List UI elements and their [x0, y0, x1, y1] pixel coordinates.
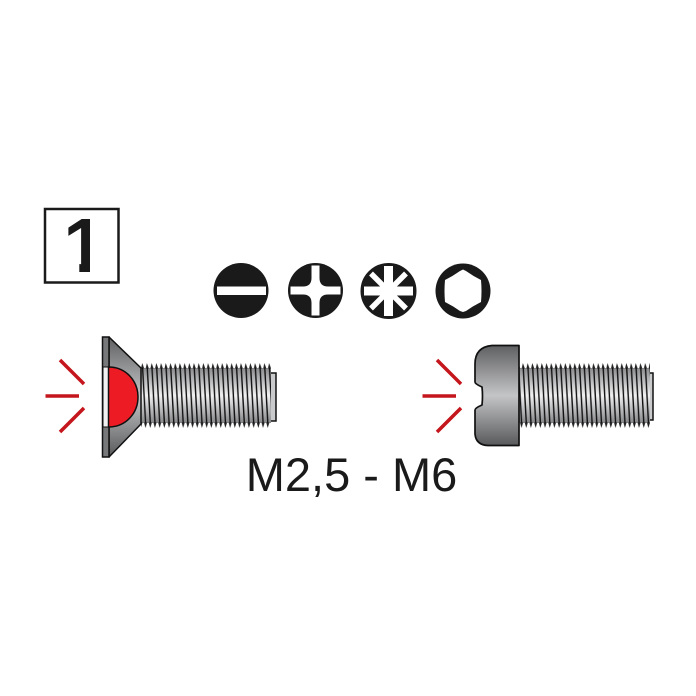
icon: slotted drive — [214, 263, 268, 318]
thread tip — [270, 373, 276, 421]
icon: pozidriv drive — [362, 264, 416, 318]
left screw red arrow marks — [46, 360, 84, 432]
head flange — [102, 337, 109, 457]
red recess — [108, 367, 138, 427]
number box: 1 — [63, 203, 106, 289]
size label: M2,5 - M6 — [246, 448, 457, 501]
flange highlight — [103, 367, 109, 427]
icon: phillips drive — [288, 263, 343, 318]
right screw: cylinder head — [475, 346, 653, 446]
threaded shaft — [519, 363, 650, 428]
threaded shaft — [141, 363, 271, 428]
left screw: countersunk head — [102, 337, 276, 457]
icon: hex drive — [436, 264, 490, 318]
cylinder head — [475, 346, 519, 446]
thread tip — [649, 373, 653, 420]
countersunk cone — [109, 337, 141, 457]
infographic: screw types — [44, 208, 654, 497]
right screw red arrow marks — [422, 360, 461, 432]
number box — [45, 203, 118, 289]
